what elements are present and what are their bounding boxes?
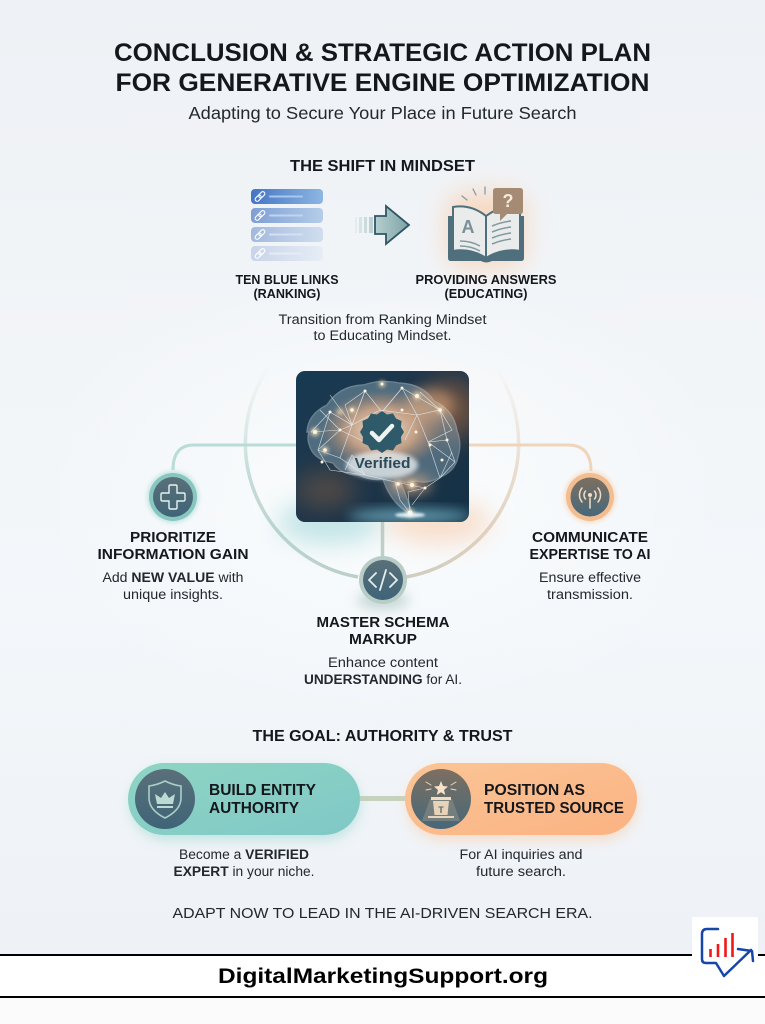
text: build entity description: EXPERT in your niche. [174, 864, 314, 879]
heading: communicate expertise: EXPERTISE TO AI [530, 547, 650, 563]
heading: prioritize information gain: PRIORITIZE [130, 530, 216, 546]
diagram connectors: arc and lines [173, 365, 591, 577]
heading: communicate expertise [530, 530, 650, 563]
pill: position as trusted source: POSITION AS [484, 782, 585, 799]
label: providing answers: (EDUCATING) [444, 286, 528, 301]
text: communicate description [539, 570, 641, 602]
text: schema description [304, 655, 462, 687]
text: transition description: Transition from Ranking Mindset [278, 312, 487, 327]
text: communicate description: transmission. [547, 587, 633, 602]
heading: master schema markup: MARKUP [349, 632, 417, 648]
text: build entity description [174, 847, 314, 879]
text: trusted source description: future search. [476, 864, 566, 879]
pill: build entity authority [128, 763, 360, 840]
text: transition description [278, 312, 487, 343]
icon: podium with star: T [438, 805, 444, 815]
icon: shield with crown [135, 769, 195, 829]
heading: communicate expertise: COMMUNICATE [532, 530, 648, 546]
icon: open book with question bubble [446, 187, 526, 268]
badge: verified check [360, 411, 404, 453]
icon: code [357, 556, 409, 610]
icon: ten blue links list [251, 189, 323, 261]
text: communicate description: Ensure effective [539, 570, 641, 585]
pill: build entity authority: AUTHORITY [209, 800, 299, 817]
text: schema description: UNDERSTANDING for AI. [304, 672, 462, 687]
title: FOR GENERATIVE ENGINE OPTIMIZATION [116, 69, 650, 97]
heading: prioritize information gain: INFORMATION GAIN [98, 547, 248, 563]
icon: signal [564, 471, 616, 523]
icon: podium with star [411, 769, 471, 829]
label: verified: Verified [354, 455, 410, 472]
icon: open book with question bubble: ? [502, 191, 514, 211]
arrow: shift [355, 206, 409, 244]
pill: build entity authority: BUILD ENTITY [209, 782, 316, 799]
label: ten blue links: TEN BLUE LINKS [236, 272, 339, 287]
footer band: DigitalMarketingSupport.org [218, 964, 548, 988]
text: trusted source description: For AI inquiries and [460, 847, 582, 862]
title [114, 39, 651, 97]
heading: master schema markup [316, 615, 450, 648]
icon: open book with question bubble: A [462, 217, 474, 237]
central image: verified brain [278, 371, 490, 544]
text: prioritize description: unique insights. [123, 587, 223, 602]
label: providing answers [416, 272, 557, 301]
connector: between pills [355, 796, 410, 801]
text: transition description: to Educating Mindset. [314, 328, 452, 343]
text: prioritize description [102, 570, 243, 602]
pill: position as trusted source: TRUSTED SOURCE [484, 800, 624, 817]
text: schema description: Enhance content [328, 655, 438, 670]
text: trusted source description [460, 847, 582, 879]
text: build entity description: Become a VERIFIED [179, 847, 309, 862]
subtitle: Adapting to Secure Your Place in Future Search [188, 103, 576, 123]
text: prioritize description: Add NEW VALUE with [102, 570, 243, 585]
label: ten blue links [236, 272, 339, 301]
pill: position as trusted source [405, 763, 637, 840]
logo [692, 917, 758, 979]
title: CONCLUSION & STRATEGIC ACTION PLAN [114, 39, 651, 67]
icon: plus [147, 471, 199, 523]
heading: the shift in mindset: THE SHIFT IN MINDSET [290, 158, 476, 175]
label: providing answers: PROVIDING ANSWERS [416, 272, 557, 287]
footer band [0, 954, 765, 1024]
heading: the goal: THE GOAL: AUTHORITY & TRUST [252, 728, 513, 745]
call to action: ADAPT NOW TO LEAD IN THE AI-DRIVEN SEARCH ERA. [172, 905, 592, 922]
heading: prioritize information gain [98, 530, 248, 563]
heading: master schema markup: MASTER SCHEMA [316, 615, 450, 631]
label: ten blue links: (RANKING) [254, 286, 320, 301]
